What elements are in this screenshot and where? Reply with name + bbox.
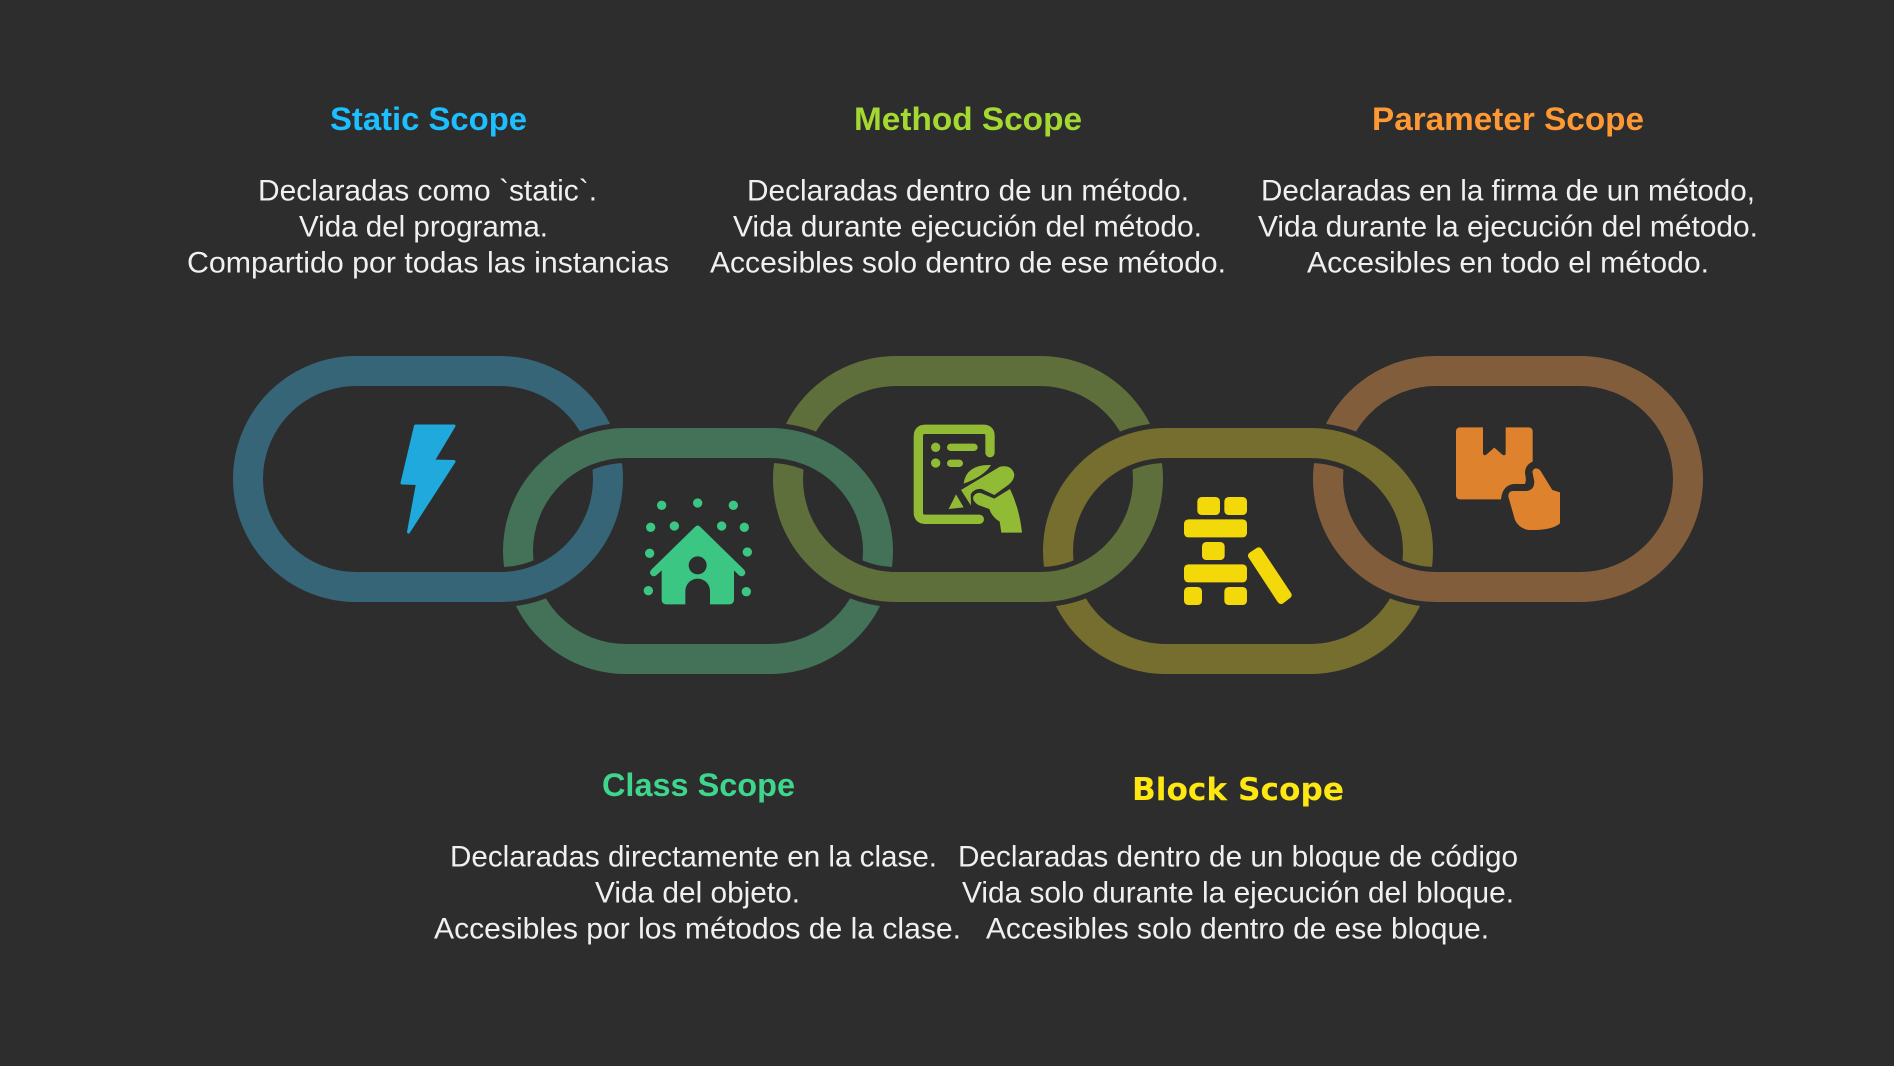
text: class scope description: Accesibles por los métodos de la clase. <box>434 913 961 946</box>
icon: lightning bolt <box>402 426 454 532</box>
text: class scope description: Declaradas directamente en la clase. <box>450 841 937 874</box>
heading: method scope: Method Scope <box>854 101 1082 137</box>
panel: class scope <box>434 767 961 946</box>
upper links: static, method, parameter <box>248 371 1688 587</box>
icon: package in hand <box>1456 427 1560 530</box>
text: parameter scope description: Declaradas en la firma de un método, <box>1261 175 1755 208</box>
lower links: class, block <box>518 443 1418 659</box>
text: class scope description <box>434 841 961 946</box>
heading: block scope: Block Scope <box>1132 772 1344 808</box>
heading: static scope: Static Scope <box>330 101 527 137</box>
text: block scope description <box>958 841 1518 946</box>
text: parameter scope description: Accesibles en todo el método. <box>1307 247 1709 280</box>
icon: document with hand and pen <box>918 429 1022 533</box>
text: parameter scope description <box>1258 175 1758 280</box>
text: block scope description: Declaradas dentro de un bloque de código <box>958 841 1518 874</box>
text: method scope description <box>710 175 1226 280</box>
text: method scope description: Accesibles solo dentro de ese método. <box>710 247 1226 280</box>
heading: parameter scope: Parameter Scope <box>1372 101 1644 137</box>
panel: block scope <box>958 772 1518 946</box>
text: class scope description: Vida del objeto. <box>595 877 800 910</box>
heading: class scope: Class Scope <box>602 767 795 803</box>
icon: house with dots <box>644 498 752 604</box>
text: method scope description: Declaradas dentro de un método. <box>747 175 1189 208</box>
text: parameter scope description: Vida durante la ejecución del método. <box>1258 211 1758 244</box>
icon: toppling blocks <box>1184 497 1288 605</box>
text: static scope description: Compartido por todas las instancias <box>187 247 669 280</box>
text: static scope description: Vida del programa. <box>299 211 548 244</box>
upper links passing over the lower links at the bottom crossings <box>240 515 1696 606</box>
text: static scope description <box>187 175 669 280</box>
chain of five interlocking links <box>248 371 1688 659</box>
panel: static scope <box>187 101 669 280</box>
text: block scope description: Accesibles solo dentro de ese bloque. <box>986 913 1489 946</box>
text: static scope description: Declaradas como `static`. <box>258 175 597 208</box>
panel: method scope <box>710 101 1226 280</box>
text: method scope description: Vida durante ejecución del método. <box>733 211 1202 244</box>
text: block scope description: Vida solo durante la ejecución del bloque. <box>962 877 1514 910</box>
panel: parameter scope <box>1258 101 1758 280</box>
